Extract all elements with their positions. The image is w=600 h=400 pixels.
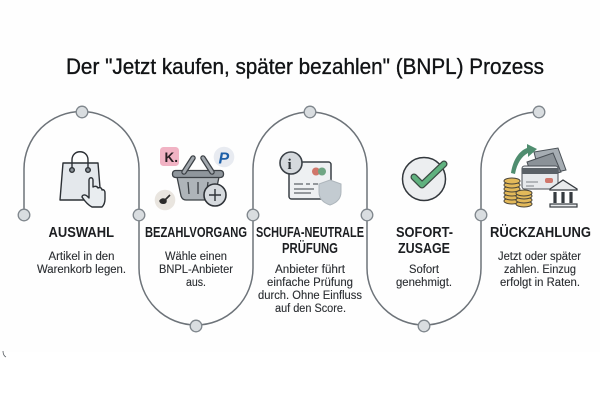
title: Der "Jetzt kaufen, später bezahlen" (BNPL) Prozess (66, 54, 544, 79)
icon: credit check card with info and shield (280, 152, 341, 205)
icon: shopping bag with pointing hand (60, 152, 105, 207)
icon: repayment cards, coins and bank (504, 144, 577, 207)
step 1 text: Warenkorb legen. (37, 264, 126, 276)
step 2 text: BEZAHLVORGANG (145, 224, 247, 241)
icon: credit check card with info and shield: i (288, 157, 292, 173)
step 3 text: Anbieter führt (275, 264, 346, 276)
process path with nodes (18, 106, 545, 332)
step 3 text: durch. Ohne Einfluss (258, 290, 362, 302)
step 3 text: einfache Prüfung (267, 277, 353, 289)
step 2 text: Wähle einen (165, 251, 227, 263)
step 4 text: Sofort (409, 264, 440, 276)
step 5 text: zahlen. Einzug (504, 264, 576, 276)
step 3 text: auf den Score. (275, 303, 346, 315)
step 3 text (256, 224, 364, 315)
step 3 text: SCHUFA-NEUTRALE (256, 224, 364, 241)
step 2 text: BNPL-Anbieter (159, 264, 233, 276)
corner mark (3, 351, 6, 357)
step 2 text (145, 224, 247, 289)
step 4 text: SOFORT- (396, 224, 453, 241)
step 1 text: Artikel in den (48, 251, 114, 263)
step 5 text: Jetzt oder später (498, 251, 581, 263)
icon: shopping basket with payment providers (155, 147, 234, 210)
step 4 text (396, 224, 453, 289)
icon: shopping basket with payment providers: P (218, 150, 230, 168)
step 3 text: PRÜFUNG (282, 240, 338, 257)
step 4 text: ZUSAGE (398, 240, 450, 257)
step 4 text: genehmigt. (396, 277, 452, 289)
step 2 text: aus. (186, 277, 206, 289)
step 5 text (490, 224, 591, 289)
icon: shopping basket with payment providers: K. (164, 150, 178, 165)
icon: approval check mark (402, 158, 446, 200)
step 1 text: AUSWAHL (48, 224, 114, 241)
step 1 text (37, 224, 126, 276)
step 5 text: erfolgt in Raten. (500, 277, 580, 289)
